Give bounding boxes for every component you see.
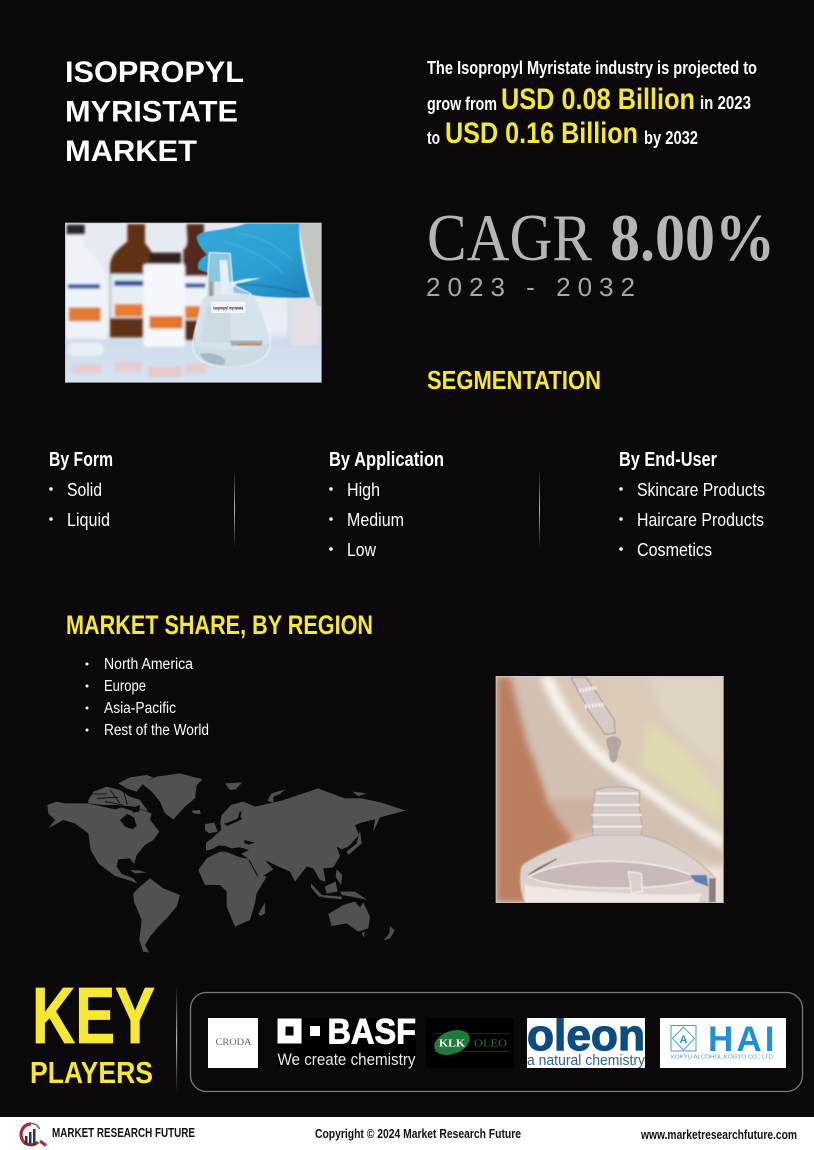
- CAGR figure: [426, 201, 775, 302]
- flask: [193, 253, 270, 367]
- photo: gloved hand holding flask: [65, 223, 322, 383]
- region list: Rest of the World: [104, 722, 209, 739]
- logo: Oleon: oleon: [527, 1011, 645, 1060]
- footer logo icon: [21, 1123, 46, 1146]
- segment column: by application: [329, 449, 444, 560]
- region list: North America: [104, 656, 193, 673]
- region list: Asia-Pacific: [104, 700, 176, 717]
- title: MYRISTATE: [65, 96, 238, 128]
- segment column: by end-user: Skincare Products: [637, 480, 765, 500]
- region list: Europe: [104, 678, 146, 695]
- segment column: by form: Solid: [67, 480, 102, 500]
- key players heading: KEY: [32, 971, 155, 1060]
- footer bar: [0, 1117, 814, 1150]
- market projection text: in 2023: [700, 93, 751, 113]
- segment column: by end-user: By End-User: [619, 449, 717, 471]
- key players panel: [190, 992, 802, 1092]
- market projection text: USD 0.16 Billion: [445, 117, 638, 150]
- logo: Oleon: a natural chemistry: [527, 1053, 646, 1069]
- market projection text: [427, 58, 757, 150]
- photo: gloved hand holding flask: isopropyl myristate: [213, 305, 243, 311]
- segment column: by application: By Application: [329, 449, 444, 471]
- logo: HAI: [660, 1018, 786, 1068]
- photo: dropper over glass bottle: [496, 676, 724, 903]
- CAGR figure: CAGR: [427, 201, 592, 275]
- title: ISOPROPYL: [65, 56, 244, 89]
- world map: [47, 773, 406, 953]
- segment column: by application: High: [347, 480, 380, 500]
- logo: BASF: [277, 1012, 416, 1069]
- logo: Croda: CRODA: [216, 1038, 252, 1048]
- segment column: by end-user: Haircare Products: [637, 510, 764, 530]
- logo: HAI: HAI: [708, 1020, 774, 1059]
- heading: segmentation: SEGMENTATION: [427, 365, 601, 395]
- market projection text: USD 0.08 Billion: [501, 83, 695, 116]
- CAGR figure: 2023 - 2032: [426, 272, 635, 302]
- region list: [86, 656, 209, 739]
- heading: market share by region: MARKET SHARE, BY REGION: [66, 610, 373, 640]
- segment column: by application: Low: [347, 540, 377, 560]
- market projection text: by 2032: [644, 128, 698, 148]
- CAGR figure: 8.00%: [610, 201, 775, 275]
- logo: KLK Oleo: OLEO: [474, 1038, 507, 1050]
- logo: KLK Oleo: [426, 1018, 514, 1068]
- segment column: by end-user: Cosmetics: [637, 540, 712, 560]
- segment column: by form: [49, 449, 113, 530]
- logo: Croda: [208, 1018, 258, 1068]
- logo: BASF: BASF: [328, 1012, 416, 1052]
- segment column: by application: Medium: [347, 510, 404, 530]
- market projection text: to: [427, 128, 440, 148]
- logo: BASF: We create chemistry: [278, 1051, 416, 1069]
- logo: HAI: KOKYU ALCOHOL KOGYO CO., LTD.: [671, 1054, 774, 1060]
- segment column: by form: By Form: [49, 449, 113, 471]
- segment column: by form: Liquid: [67, 510, 110, 530]
- footer brand name: MARKET RESEARCH FUTURE: [52, 1126, 195, 1140]
- logo: HAI: A: [680, 1034, 688, 1046]
- segment column: by end-user: [619, 449, 765, 560]
- title: [65, 56, 244, 168]
- market projection text: grow from: [427, 94, 497, 114]
- footer copyright: Copyright © 2024 Market Research Future: [315, 1126, 521, 1141]
- glove: [197, 223, 310, 298]
- key players heading: [30, 971, 155, 1090]
- logo: KLK Oleo: KLK: [439, 1038, 466, 1050]
- key players heading: PLAYERS: [30, 1055, 153, 1090]
- title: MARKET: [65, 135, 197, 168]
